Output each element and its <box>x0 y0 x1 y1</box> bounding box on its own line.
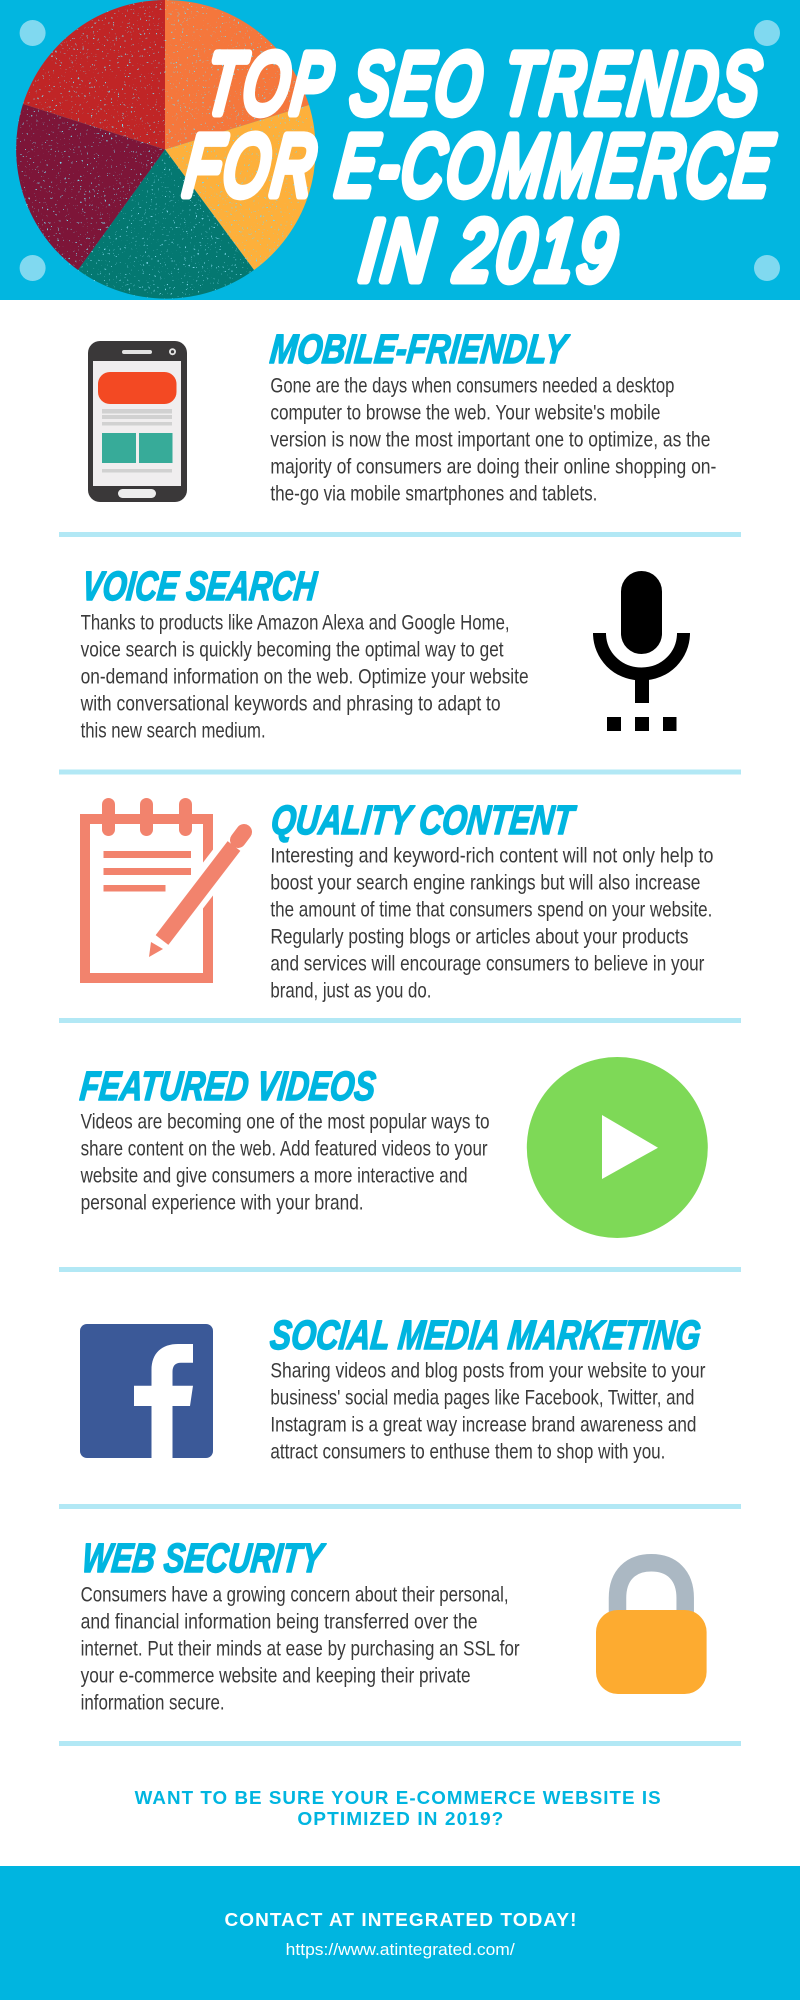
heading: voice search: VOICE SEARCH <box>80 563 320 609</box>
text: mobile-friendly body: majority of consumers are doing their online shopping on- <box>270 456 716 479</box>
text: social media body: Instagram is a great way increase brand awareness and <box>270 1414 696 1437</box>
panel: featured videos <box>78 1057 708 1238</box>
text: mobile-friendly body: Gone are the days when consumers needed a desktop <box>270 375 674 398</box>
panel: mobile-friendly <box>88 326 716 506</box>
text: featured videos body: personal experience with your brand. <box>81 1192 364 1215</box>
text: quality content body: and services will encourage consumers to believe in your <box>270 953 704 976</box>
text: mobile-friendly body: the-go via mobile smartphones and tablets. <box>270 483 597 506</box>
text: mobile-friendly body: computer to browse the web. Your website's mobile <box>270 402 660 425</box>
text: social media body <box>270 1360 705 1464</box>
text: quality content body: Interesting and keyword-rich content will not only help to <box>270 845 713 868</box>
title <box>180 36 780 299</box>
icon: facebook logo <box>80 1324 213 1458</box>
title: IN 2019 <box>356 203 625 299</box>
icon: smartphone <box>88 341 187 502</box>
header banner <box>0 0 800 300</box>
panel: social media marketing <box>80 1312 705 1464</box>
heading: web security: WEB SECURITY <box>80 1535 328 1581</box>
pie chart illustration <box>16 0 316 299</box>
icon: padlock <box>596 1563 707 1694</box>
icon: play button <box>527 1057 708 1238</box>
call to action question: OPTIMIZED IN 2019? <box>297 1809 504 1829</box>
website url: https://www.atintegrated.com/ <box>286 1941 515 1959</box>
text: quality content body: brand, just as you do. <box>270 980 431 1003</box>
panel: quality content <box>85 797 713 1003</box>
contact heading: CONTACT AT INTEGRATED TODAY! <box>224 1910 578 1930</box>
footer background <box>0 1866 800 2000</box>
panel: voice search <box>80 563 683 742</box>
heading: quality content: QUALITY CONTENT <box>269 797 578 843</box>
text: voice search body: with conversational keywords and phrasing to adapt to <box>80 692 501 715</box>
text: voice search body: Thanks to products like Amazon Alexa and Google Home, <box>81 611 510 634</box>
text: quality content body: Regularly posting blogs or articles about your products <box>270 926 688 949</box>
text: social media body: business' social media pages like Facebook, Twitter, and <box>270 1387 694 1410</box>
header background <box>0 0 800 300</box>
text: web security body <box>81 1584 520 1715</box>
text: quality content body <box>270 845 713 1003</box>
icon: notepad and pencil <box>85 798 244 978</box>
text: quality content body: the amount of time that consumers spend on your website. <box>270 899 712 922</box>
text: featured videos body: website and give consumers a more interactive and <box>80 1165 468 1188</box>
text: quality content body: boost your search engine rankings but will also increase <box>270 872 700 895</box>
footer band <box>0 1866 800 2000</box>
text: web security body: internet. Put their minds at ease by purchasing an SSL for <box>81 1638 520 1661</box>
corner dots <box>20 20 780 281</box>
text: mobile-friendly body <box>270 375 716 506</box>
icon: microphone <box>600 571 684 731</box>
text: voice search body <box>80 611 529 742</box>
text: voice search body: voice search is quickly becoming the optimal way to get <box>81 638 504 661</box>
call to action question: WANT TO BE SURE YOUR E-COMMERCE WEBSITE IS <box>135 1788 662 1808</box>
text: featured videos body: share content on the web. Add featured videos to your <box>81 1138 488 1161</box>
text: voice search body: on-demand information on the web. Optimize your website <box>81 665 529 688</box>
text: featured videos body: Videos are becoming one of the most popular ways to <box>81 1111 490 1134</box>
text: web security body: and financial information being transferred over the <box>81 1611 478 1634</box>
heading: mobile-friendly: MOBILE-FRIENDLY <box>268 326 572 372</box>
text: featured videos body <box>80 1111 490 1215</box>
text: social media body: Sharing videos and blog posts from your website to your <box>270 1360 705 1383</box>
text: social media body: attract consumers to enthuse them to shop with you. <box>270 1441 665 1464</box>
heading: featured videos: FEATURED VIDEOS <box>78 1063 378 1109</box>
text: mobile-friendly body: version is now the most important one to optimize, as the <box>270 429 710 452</box>
call to action question <box>135 1788 662 1829</box>
text: voice search body: this new search medium. <box>81 719 266 742</box>
text: web security body: your e-commerce website and keeping their private <box>81 1665 471 1688</box>
panel: web security <box>80 1535 707 1715</box>
text: web security body: Consumers have a growing concern about their personal, <box>81 1584 509 1607</box>
text: web security body: information secure. <box>81 1692 225 1715</box>
